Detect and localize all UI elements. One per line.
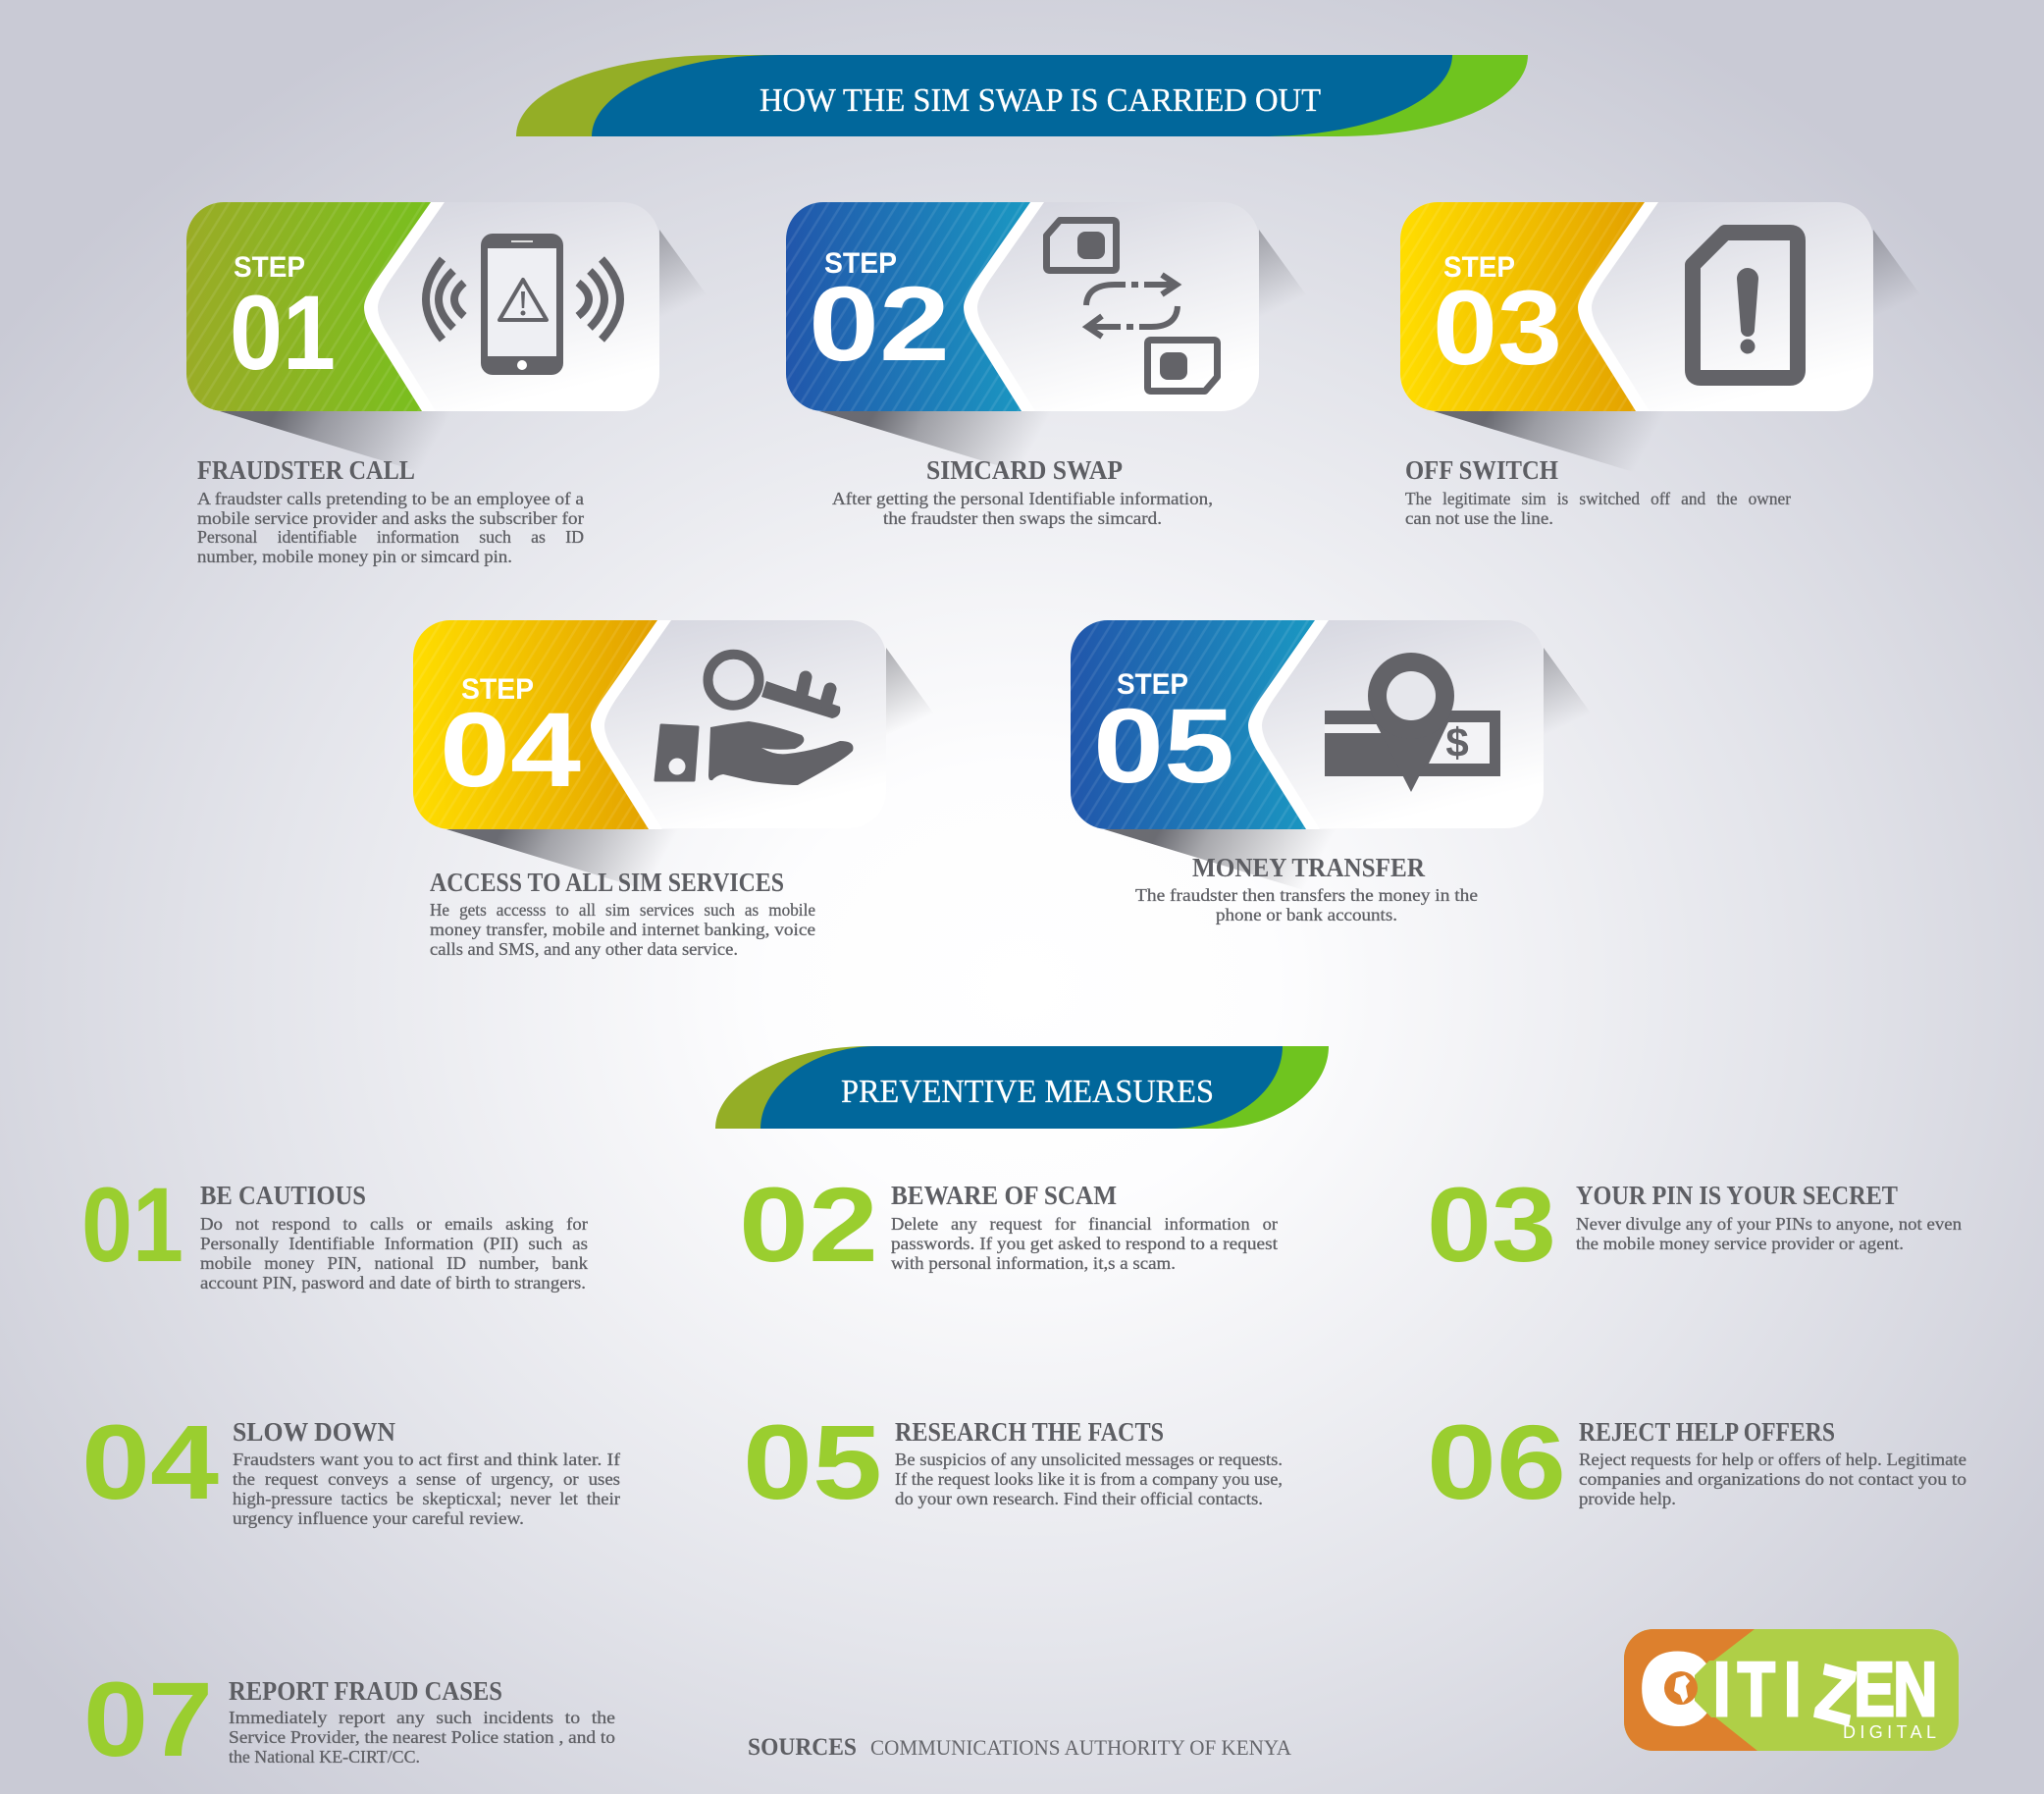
heading: access to all sim services: ACCESS TO ALL SIM SERVICES	[430, 868, 784, 897]
heading: research the facts: RESEARCH THE FACTS	[895, 1417, 1164, 1447]
text: off switch description: The legitimate sim is switched off and the owner	[1405, 489, 1791, 508]
text: slow down description	[233, 1450, 620, 1528]
icon: location pin on banknote: $	[1445, 719, 1469, 765]
step 03 label: STEP	[1443, 251, 1515, 284]
heading: simcard swap: SIMCARD SWAP	[926, 455, 1123, 485]
text: be cautious description: Do not respond to calls or emails asking for	[200, 1214, 588, 1234]
text: beware of scam description: with personal information, it,s a scam.	[891, 1253, 1176, 1273]
logo: citizen digital: DIGITAL	[1843, 1722, 1936, 1742]
measure 04: slow down	[81, 1402, 620, 1528]
step 04 label: 04	[440, 690, 581, 809]
step 05 label: STEP	[1117, 668, 1188, 701]
text: money transfer description	[1135, 885, 1478, 924]
text: report fraud cases description: Service Provider, the nearest Police station , and to	[229, 1727, 615, 1747]
heading: beware of scam: BEWARE OF SCAM	[891, 1181, 1117, 1210]
panel: step 01 fraudster call	[186, 202, 721, 566]
text: fraudster call description	[197, 489, 584, 566]
step 01 card	[186, 202, 721, 497]
text: money transfer description: phone or bank accounts.	[1216, 905, 1397, 924]
heading: be cautious: BE CAUTIOUS	[200, 1181, 366, 1210]
banner: preventive measures: PREVENTIVE MEASURES	[841, 1074, 1214, 1110]
step 03 label: 03	[1433, 268, 1562, 387]
heading: slow down: SLOW DOWN	[233, 1417, 395, 1447]
text: fraudster call description: Personal identifiable information such as ID	[197, 527, 584, 547]
text: be cautious description	[200, 1214, 588, 1293]
measure 07: report fraud cases	[83, 1660, 615, 1778]
text: be cautious description: account PIN, pasword and date of birth to strangers.	[200, 1273, 586, 1293]
step 02 label: 02	[809, 264, 950, 383]
panel: step 04 access to all sim services	[413, 620, 948, 959]
text: be cautious description: mobile money PIN, national ID number, bank	[200, 1253, 588, 1273]
text: slow down description: high-pressure tactics be skepticxal; never let their	[233, 1489, 620, 1508]
banner: preventive measures	[715, 1046, 1329, 1129]
number 05: 05	[743, 1402, 882, 1521]
icon: phone with warning and signal waves	[426, 234, 620, 375]
step 04 card	[413, 620, 948, 915]
number 04: 04	[81, 1402, 219, 1521]
number 01: 01	[81, 1165, 183, 1284]
text: reject help offers description: provide help.	[1579, 1489, 1676, 1508]
text: reject help offers description: Reject requests for help or offers of help. Legitimate	[1579, 1450, 1966, 1469]
step 05 card	[1071, 620, 1605, 915]
text: simcard swap description: the fraudster then swaps the simcard.	[883, 508, 1162, 528]
logo: citizen digital: ITIZEN	[1713, 1646, 1937, 1741]
text: beware of scam description: passwords. If you get asked to respond to a request	[891, 1234, 1278, 1253]
text: access description	[430, 900, 815, 959]
step 01 label: 01	[230, 273, 336, 392]
text: be cautious description: Personally Identifiable Information (PII) such as	[200, 1234, 588, 1254]
text: simcard swap description	[832, 489, 1213, 528]
text: beware of scam description	[891, 1214, 1278, 1273]
logo: citizen digital: C	[1640, 1633, 1712, 1745]
text: fraudster call description: mobile service provider and asks the subscriber for	[197, 508, 584, 528]
heading: your pin is your secret: YOUR PIN IS YOUR SECRET	[1576, 1181, 1898, 1210]
sources	[748, 1734, 1291, 1761]
number 02: 02	[739, 1165, 878, 1284]
text: fraudster call description: A fraudster calls pretending to be an employee of a	[197, 489, 584, 508]
text: reject help offers description	[1579, 1450, 1966, 1508]
panel: step 05 money transfer	[1071, 620, 1605, 924]
step 03 card	[1400, 202, 1935, 497]
logo: citizen digital	[1624, 1629, 1959, 1751]
step 05 label: 05	[1093, 686, 1234, 805]
measure 03: your pin is your secret	[1427, 1165, 1962, 1284]
heading: report fraud cases: REPORT FRAUD CASES	[229, 1676, 502, 1706]
measure 02: beware of scam	[739, 1165, 1278, 1284]
step 02 card	[786, 202, 1321, 497]
text: research the facts description: If the request looks like it is from a company you use,	[895, 1469, 1283, 1489]
text: research the facts description: do your own research. Find their official contacts.	[895, 1489, 1263, 1508]
text: beware of scam description: Delete any request for financial information or	[891, 1214, 1278, 1234]
banner: how the sim swap is carried out: HOW THE SIM SWAP IS CARRIED OUT	[760, 82, 1321, 119]
heading: off switch: OFF SWITCH	[1405, 455, 1558, 485]
sources: COMMUNICATIONS AUTHORITY OF KENYA	[870, 1735, 1291, 1760]
text: your pin description: the mobile money service provider or agent.	[1576, 1234, 1904, 1253]
number 07: 07	[83, 1660, 213, 1778]
icon: sim swap arrows	[1046, 220, 1217, 391]
text: report fraud cases description	[229, 1708, 615, 1767]
heading: fraudster call: FRAUDSTER CALL	[197, 455, 415, 485]
icon: key over hand	[655, 655, 853, 785]
text: your pin description: Never divulge any of your PINs to anyone, not even	[1576, 1214, 1962, 1234]
measure 06: reject help offers	[1427, 1402, 1966, 1521]
panel: step 03 off switch	[1400, 202, 1935, 528]
text: off switch description: can not use the line.	[1405, 508, 1553, 528]
text: access description: He gets accesss to all sim services such as mobile	[430, 900, 815, 920]
text: access description: money transfer, mobile and internet banking, voice	[430, 920, 815, 939]
text: slow down description: the request conveys a sense of urgency, or uses	[233, 1469, 620, 1489]
step 04 label: STEP	[461, 673, 534, 706]
icon: location pin on banknote	[1325, 653, 1500, 792]
text: off switch description	[1405, 489, 1791, 528]
number 03: 03	[1427, 1165, 1556, 1284]
heading: money transfer: MONEY TRANSFER	[1192, 853, 1425, 882]
heading: reject help offers: REJECT HELP OFFERS	[1579, 1417, 1835, 1447]
step 01 label: STEP	[234, 251, 305, 284]
icon: sim card with exclamation	[1693, 233, 1798, 378]
number 06: 06	[1427, 1402, 1566, 1521]
text: reject help offers description: companies and organizations do not contact you to	[1579, 1469, 1966, 1489]
step 02 label: STEP	[824, 247, 897, 280]
banner: how the sim swap is carried out	[516, 55, 1528, 136]
measure 05: research the facts	[743, 1402, 1283, 1521]
text: slow down description: urgency influence your careful review.	[233, 1508, 524, 1528]
text: research the facts description	[895, 1450, 1283, 1508]
text: your pin description	[1576, 1214, 1962, 1253]
measure 01: be cautious	[81, 1165, 588, 1293]
text: money transfer description: The fraudster then transfers the money in the	[1135, 885, 1478, 905]
text: report fraud cases description: Immediately report any such incidents to the	[229, 1708, 615, 1727]
text: fraudster call description: number, mobile money pin or simcard pin.	[197, 547, 512, 566]
text: slow down description: Fraudsters want you to act first and think later. If	[233, 1450, 620, 1469]
text: simcard swap description: After getting the personal Identifiable information,	[832, 489, 1213, 508]
sources: SOURCES	[748, 1734, 857, 1761]
panel: step 02 simcard swap	[786, 202, 1321, 528]
text: access description: calls and SMS, and any other data service.	[430, 939, 738, 959]
text: report fraud cases description: the National KE-CIRT/CC.	[229, 1747, 420, 1767]
text: research the facts description: Be suspicios of any unsolicited messages or requests.	[895, 1450, 1283, 1469]
